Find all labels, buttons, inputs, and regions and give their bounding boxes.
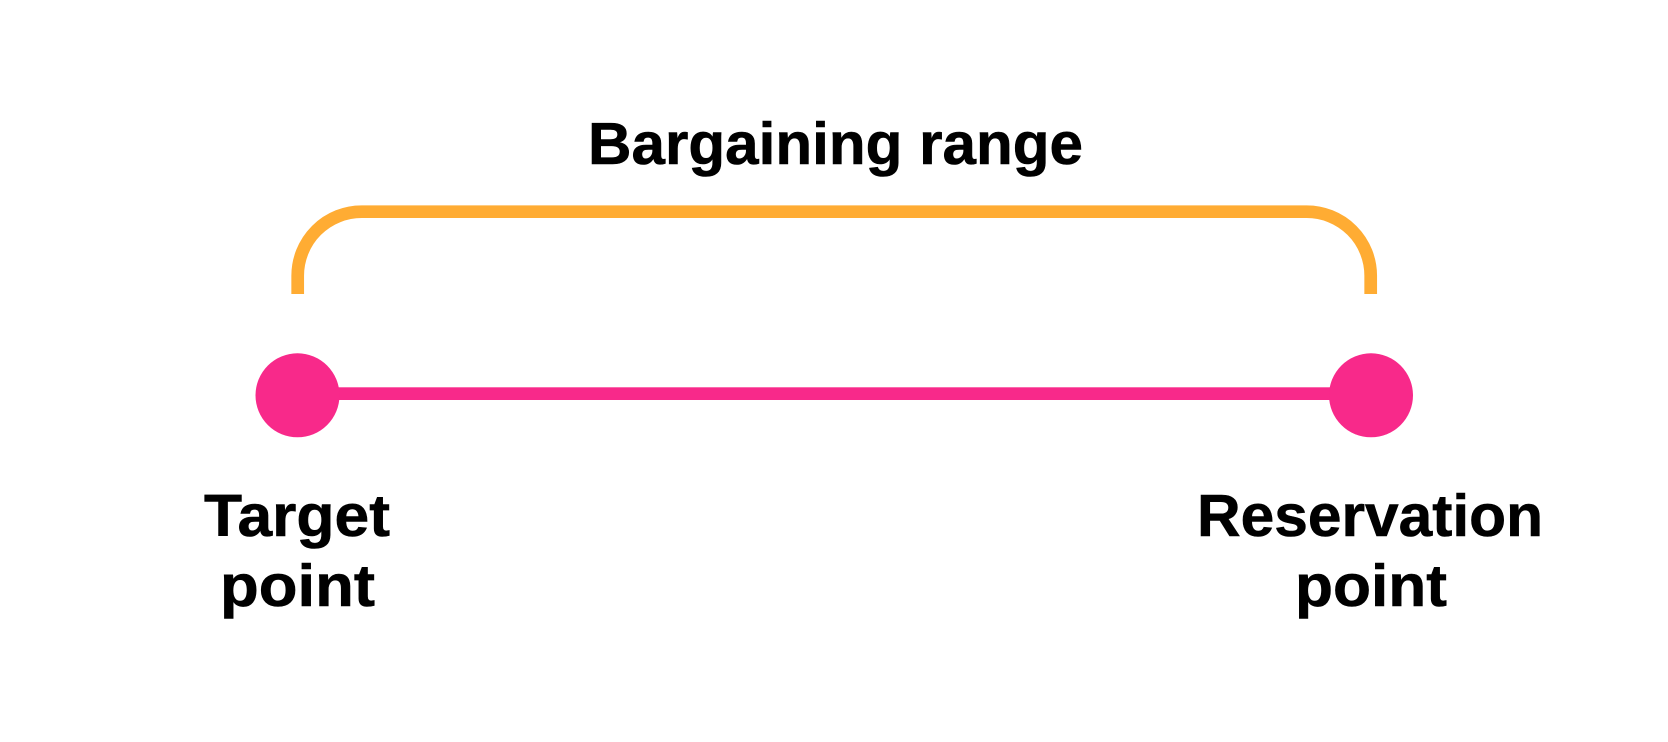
label: Target point: point	[220, 553, 375, 619]
label: Target point: Target	[204, 483, 390, 549]
label: Reservation point: point	[1295, 553, 1447, 619]
line: target to reservation	[330, 387, 1340, 400]
label: Target point	[204, 483, 390, 619]
marker: reservation point	[1329, 353, 1413, 437]
label: Reservation point	[1197, 483, 1543, 619]
marker: target point	[256, 353, 340, 437]
bracket: bargaining range span	[298, 212, 1371, 294]
heading: Bargaining range: Bargaining range	[588, 111, 1083, 177]
label: Reservation point: Reservation	[1197, 483, 1543, 549]
